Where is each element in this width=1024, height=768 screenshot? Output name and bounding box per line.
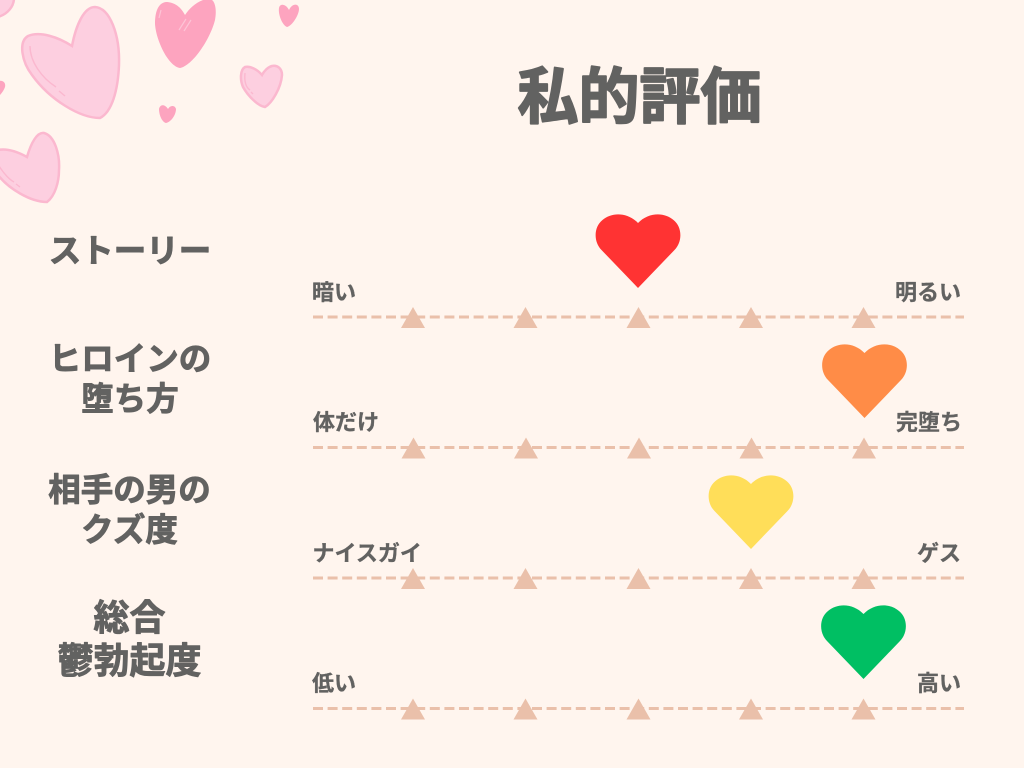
- icon: yellow heart marker: [709, 475, 793, 549]
- icon: partial pink heart left edge: [0, 81, 5, 96]
- icon: orange heart marker: [822, 344, 907, 418]
- icon: partial heart top-left edge: [0, 0, 14, 17]
- row: ストーリー: [49, 214, 964, 328]
- category label: 堕ち方: [81, 381, 179, 417]
- category label: 相手の男の: [48, 472, 211, 508]
- icon: green heart marker: [821, 605, 906, 679]
- right scale label: ゲス: [917, 541, 961, 566]
- icon: red heart marker: [596, 214, 680, 288]
- icon: tiny pink heart: [159, 105, 176, 123]
- scale with ticks: [313, 307, 964, 328]
- right scale label: 高い: [917, 671, 961, 696]
- icon: small top-right heart: [279, 5, 299, 27]
- category label: 総合: [93, 597, 166, 638]
- title: 私的評価: [517, 63, 762, 131]
- category label: 鬱勃起度: [57, 640, 202, 681]
- left scale label: 暗い: [312, 280, 356, 305]
- category label: ヒロインの: [49, 341, 211, 377]
- right scale label: 完堕ち: [896, 410, 962, 435]
- left scale label: 体だけ: [313, 410, 379, 435]
- scale with ticks: [313, 568, 964, 589]
- icon: large pale heart: [22, 7, 119, 118]
- row: ヒロインの堕ち方: [49, 341, 964, 458]
- scale with ticks: [313, 438, 964, 458]
- icon: pink heart top: [155, 0, 216, 68]
- left scale label: ナイスガイ: [312, 541, 422, 566]
- category label: ストーリー: [49, 233, 211, 269]
- left scale label: 低い: [312, 671, 356, 696]
- icon: lower-left pale heart: [0, 133, 59, 202]
- row: 相手の男のクズ度: [48, 472, 964, 589]
- decorative hearts cluster: [0, 0, 299, 202]
- row: 総合鬱勃起度: [57, 597, 964, 720]
- category label: クズ度: [81, 511, 178, 548]
- icon: medium pale heart: [241, 66, 282, 107]
- right scale label: 明るい: [895, 280, 961, 305]
- scale with ticks: [313, 698, 964, 720]
